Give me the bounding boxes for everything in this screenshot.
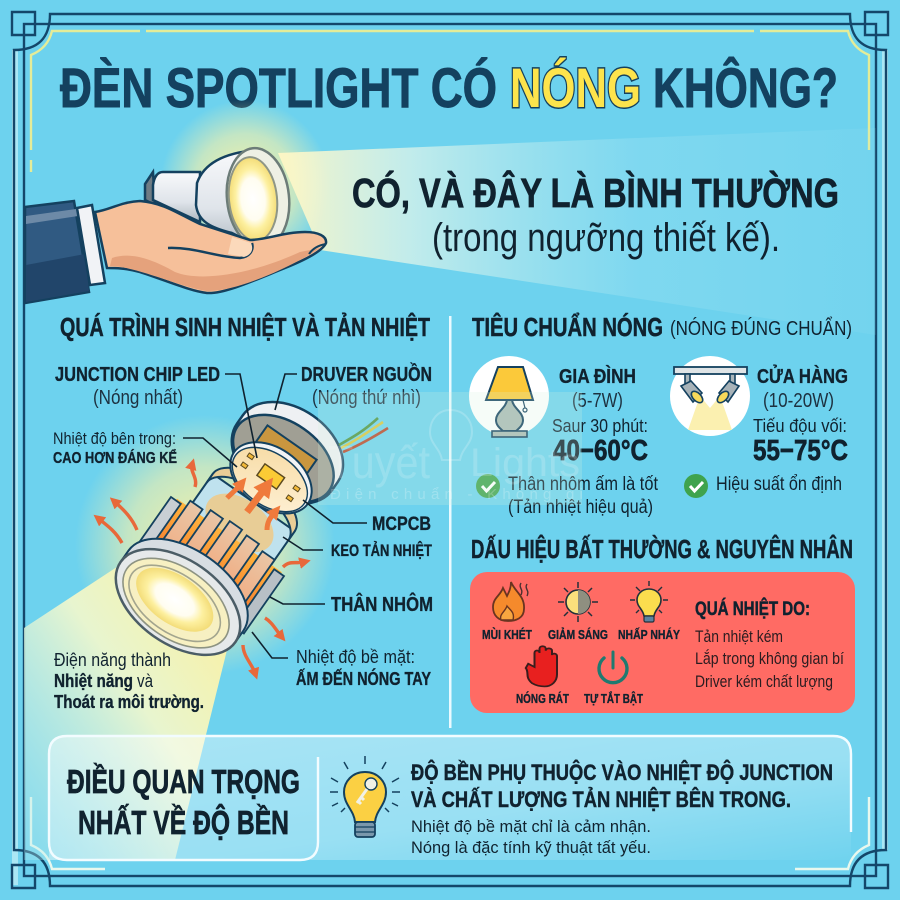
icon: table lamp: [469, 356, 549, 437]
chart: exploded spotlight diagram: [24, 373, 388, 860]
panel: temperature standards heading: [472, 312, 852, 342]
text: shop standard: [753, 364, 848, 467]
label: MCPCB: MCPCB: [372, 514, 431, 535]
watermark: Tuyết: [328, 436, 430, 488]
icon: bulb with key: [330, 756, 400, 837]
lamp parts: [97, 373, 369, 678]
panel: warning signs: [470, 572, 855, 713]
text: energy conversion: Điện năng thành: [54, 650, 171, 670]
heading: most important: NHẤT VỀ ĐỘ BỀN: [78, 803, 289, 841]
text: shop standard: CỬA HÀNG: [757, 364, 848, 388]
thermal band: [181, 454, 309, 576]
driver cap: [214, 383, 361, 523]
text: shop standard: (10-20W): [763, 390, 834, 412]
text: home note: (Tản nhiệt hiệu quả): [508, 497, 653, 518]
label: junction chip: [55, 364, 220, 409]
title: NÓNG: [510, 56, 641, 119]
label: junction chip: JUNCTION CHIP LED: [55, 364, 220, 386]
sleeve: [25, 201, 89, 303]
fingers fold: [168, 243, 252, 258]
label: burnt smell: MÙI KHÉT: [482, 627, 532, 642]
inner arrows: [227, 484, 275, 530]
label: internal temperature: CAO HƠN ĐÁNG KỂ: [53, 449, 177, 467]
title: ĐÈN SPOTLIGHT CÓ: [60, 56, 497, 119]
icon: half sun: [558, 582, 598, 622]
label: driver: [301, 362, 432, 409]
text: energy conversion: Thoát ra môi trường.: [54, 692, 204, 712]
text: overheating causes: Tản nhiệt kém: [695, 627, 783, 646]
text: durability statement: [411, 760, 833, 857]
text: overheating causes: [695, 598, 844, 691]
text: durability statement: VÀ CHẤT LƯỢNG TẢN NHIỆT BÊN TRONG.: [411, 787, 791, 812]
icon: hand holding spotlight: [25, 145, 326, 303]
title: KHÔNG?: [653, 56, 838, 119]
wires: [339, 418, 388, 452]
text: shop standard: Tiếu độu vối:: [753, 416, 847, 436]
label: flickering: NHẤP NHÁY: [618, 627, 680, 642]
icon: power symbol: [599, 652, 627, 683]
lamp base: [145, 172, 200, 222]
label: driver: DRUVER NGUỒN: [301, 362, 432, 386]
leader lines: [183, 374, 367, 658]
text: home note: [508, 474, 659, 518]
MCPCB board: [217, 428, 325, 528]
icon: flickering bulb: [630, 581, 668, 622]
lamp body and face: [196, 145, 294, 251]
watermark: Lights: [470, 441, 580, 485]
text: home standard: [552, 365, 648, 467]
text: energy conversion: và: [137, 671, 154, 691]
text: energy conversion: Nhiệt năng: [54, 671, 133, 691]
heading: most important: ĐIỀU QUAN TRỌNG: [67, 763, 300, 800]
watermark: Điện chuẩn - Không gian: [330, 486, 610, 503]
text: overheating causes: Driver kém chất lượng: [695, 672, 833, 691]
panel: heat generation heading: QUÁ TRÌNH SINH NHIỆT VÀ TẢN NHIỆT: [60, 312, 430, 342]
panel: temperature standards heading: TIÊU CHUẨN NÓNG: [472, 312, 663, 342]
light beam from hand lamp: [160, 100, 876, 335]
text: home standard: Saur 30 phút:: [552, 416, 648, 436]
label: surface temperature: ẤM ĐẾN NÓNG TAY: [296, 668, 431, 689]
panel: temperature standards heading: (NÓNG ĐÚNG CHUẨN): [670, 317, 852, 340]
label: dimming: GIẢM SÁNG: [548, 627, 608, 642]
cuff: [77, 205, 105, 285]
label: junction chip: (Nóng nhất): [93, 387, 183, 409]
label: surface temperature: [296, 647, 431, 689]
panel: durability takeaway: [49, 736, 851, 860]
label: internal temperature: [53, 429, 177, 467]
label: auto on off: TỰ TẮT BẬT: [584, 691, 643, 706]
beam and glow: [24, 415, 335, 860]
text: shop note: Hiệu suất ổn định: [716, 474, 842, 495]
text: overheating causes: Lắp trong không gian bí: [695, 649, 844, 668]
text: energy conversion: [54, 650, 204, 712]
label: burning hot: NÓNG RÁT: [516, 691, 569, 706]
text: shop standard: 55−75°C: [753, 435, 848, 467]
label: aluminium body: THÂN NHÔM: [331, 592, 433, 616]
label: surface temperature: Nhiệt độ bề mặt:: [296, 647, 415, 667]
answer headline: (trong ngưỡng thiết kế).: [432, 216, 780, 260]
text: home standard: GIA ĐÌNH: [559, 365, 636, 388]
label: driver: (Nóng thứ nhì): [312, 387, 421, 409]
icon: track spotlights: [670, 356, 750, 436]
heading: most important: [67, 763, 300, 841]
icon: check home: [476, 474, 500, 498]
heat arrows: [99, 465, 304, 673]
answer headline: [352, 170, 839, 260]
icon: flame: [493, 582, 528, 621]
label: internal temperature: Nhiệt độ bên trong:: [53, 429, 176, 448]
heat sink fins: [126, 486, 292, 640]
palm and thumb: [95, 201, 326, 293]
icon: check shop: [684, 474, 708, 498]
icon: red hand: [526, 646, 557, 686]
label: thermal paste: KEO TẢN NHIỆT: [331, 541, 432, 560]
text: home standard: 40−60°C: [553, 435, 648, 467]
watermark: [318, 392, 610, 505]
text: home standard: (5-7W): [572, 390, 623, 412]
text: overheating causes: QUÁ NHIỆT DO:: [695, 598, 810, 620]
text: durability statement: Nóng là đặc tính kỹ thuật tất yếu.: [411, 838, 651, 857]
text: durability statement: Nhiệt độ bề mặt chỉ là cảm nhận.: [411, 817, 651, 836]
text: home note: Thân nhôm ấm là tốt: [508, 474, 659, 495]
front rim: [97, 518, 266, 677]
column divider: [449, 316, 452, 728]
